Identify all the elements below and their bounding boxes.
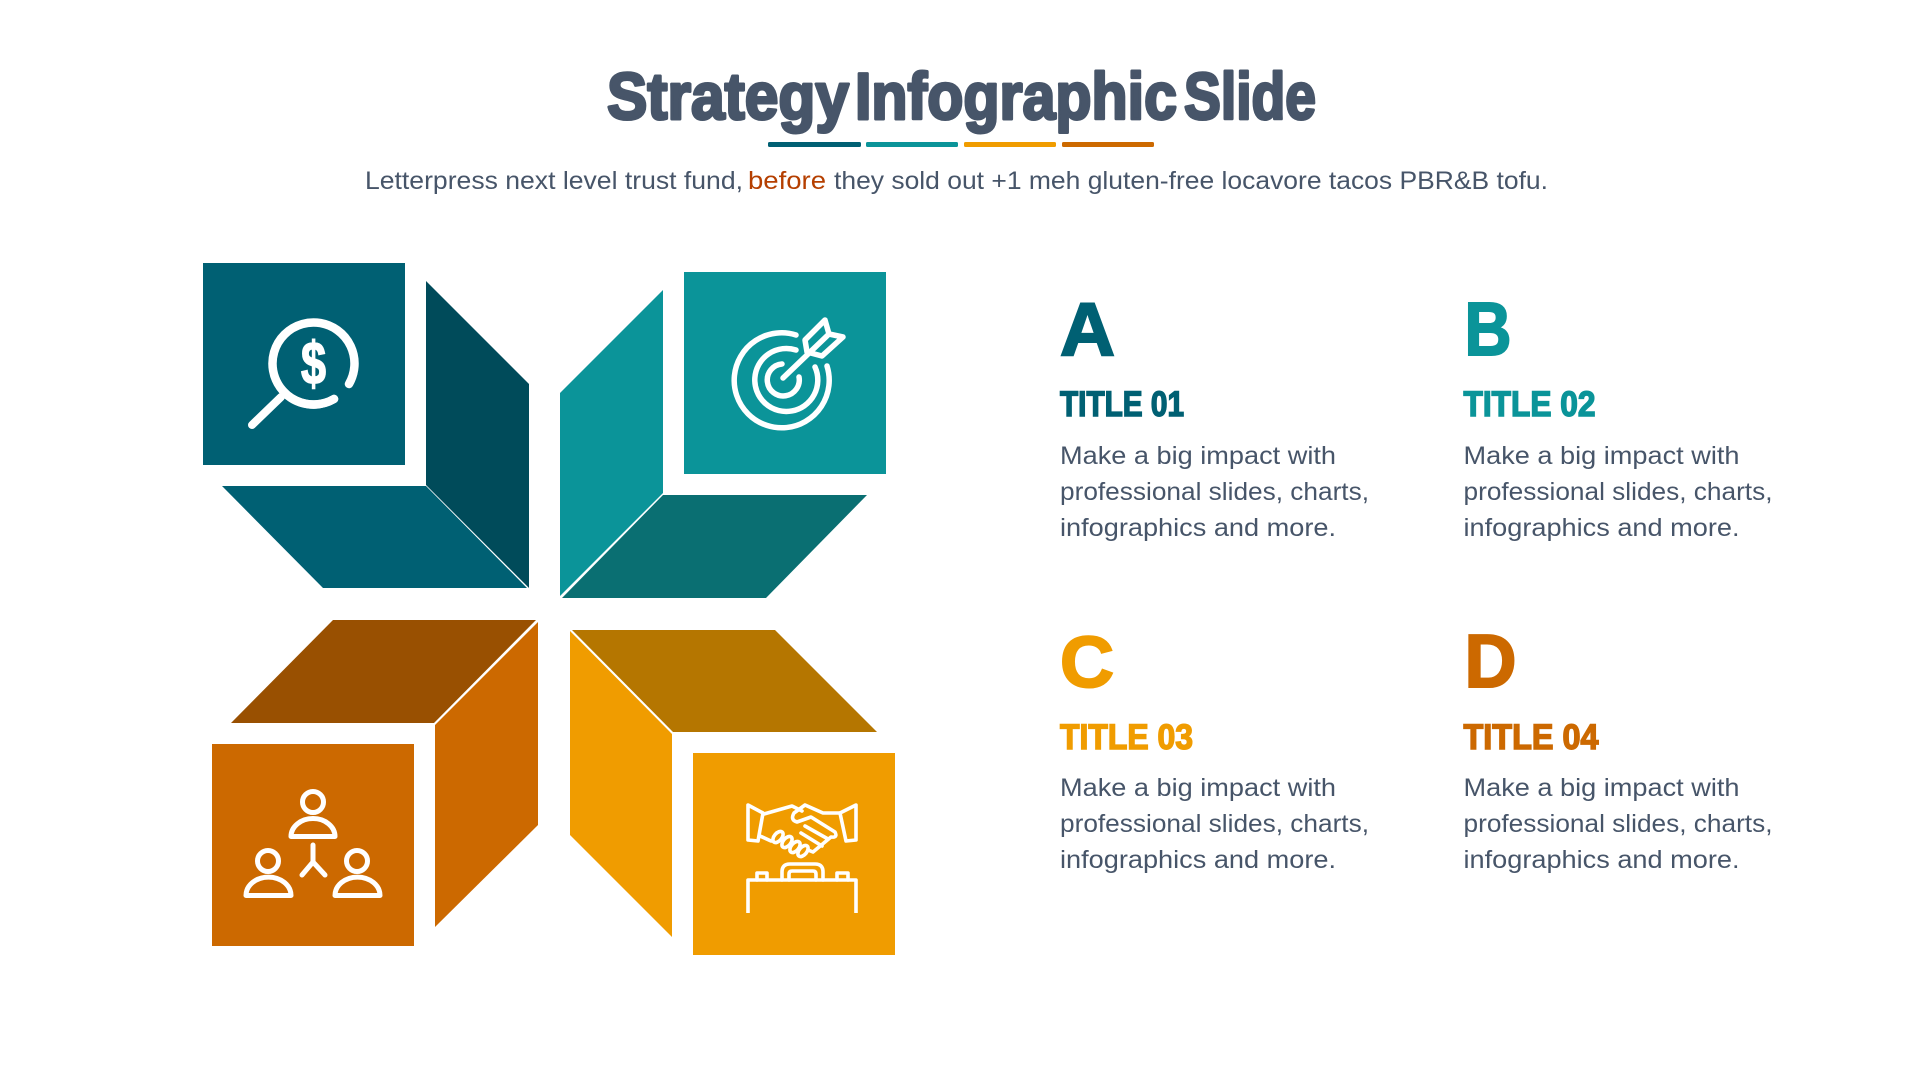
title: Slide [1184, 59, 1316, 133]
description B: infographics and more. [1464, 514, 1740, 542]
title [607, 59, 1316, 133]
description C: professional slides, charts, [1060, 810, 1369, 838]
text block D [1464, 619, 1772, 874]
description D: professional slides, charts, [1464, 810, 1772, 838]
letter C: C [1060, 623, 1114, 703]
text block A [1060, 287, 1369, 542]
text block B [1464, 287, 1772, 542]
heading: title 04: TITLE 04 [1464, 718, 1599, 757]
panel: cube C [212, 620, 538, 946]
icon: magnifier with dollar: $ [301, 330, 326, 397]
subtitle [365, 167, 1548, 195]
icon: magnifier with dollar [252, 322, 354, 425]
heading: title 03: TITLE 03 [1060, 718, 1193, 757]
heading: title 01: TITLE 01 [1060, 385, 1184, 424]
subtitle: they sold out +1 meh gluten-free locavore tacos PBR&B tofu. [834, 167, 1548, 195]
text block C [1060, 623, 1369, 874]
icon: handshake and briefcase [748, 805, 856, 913]
description B: Make a big impact with [1464, 442, 1740, 470]
description D: Make a big impact with [1464, 774, 1740, 802]
icon: target with arrow [734, 320, 843, 428]
title: Infographic [855, 59, 1177, 133]
subtitle: Letterpress next level trust fund, [365, 167, 743, 195]
description A [1060, 442, 1369, 542]
heading: title 02: TITLE 02 [1464, 385, 1596, 424]
description A: Make a big impact with [1060, 442, 1336, 470]
description B: professional slides, charts, [1464, 478, 1772, 506]
description C: Make a big impact with [1060, 774, 1336, 802]
description B [1464, 442, 1772, 542]
description D [1464, 774, 1772, 874]
description C: infographics and more. [1060, 846, 1336, 874]
title underline bars [768, 142, 1154, 147]
panel: cube D [570, 630, 895, 955]
description D: infographics and more. [1464, 846, 1740, 874]
description C [1060, 774, 1369, 874]
icon: team hierarchy [246, 792, 380, 896]
description A: professional slides, charts, [1060, 478, 1369, 506]
subtitle: before [748, 167, 826, 195]
letter D: D [1464, 619, 1516, 703]
panel: cube B [560, 272, 886, 598]
title: Strategy [607, 59, 849, 133]
description A: infographics and more. [1060, 514, 1336, 542]
letter B: B [1464, 287, 1512, 371]
letter A: A [1060, 287, 1115, 371]
panel: cube A [203, 263, 529, 588]
